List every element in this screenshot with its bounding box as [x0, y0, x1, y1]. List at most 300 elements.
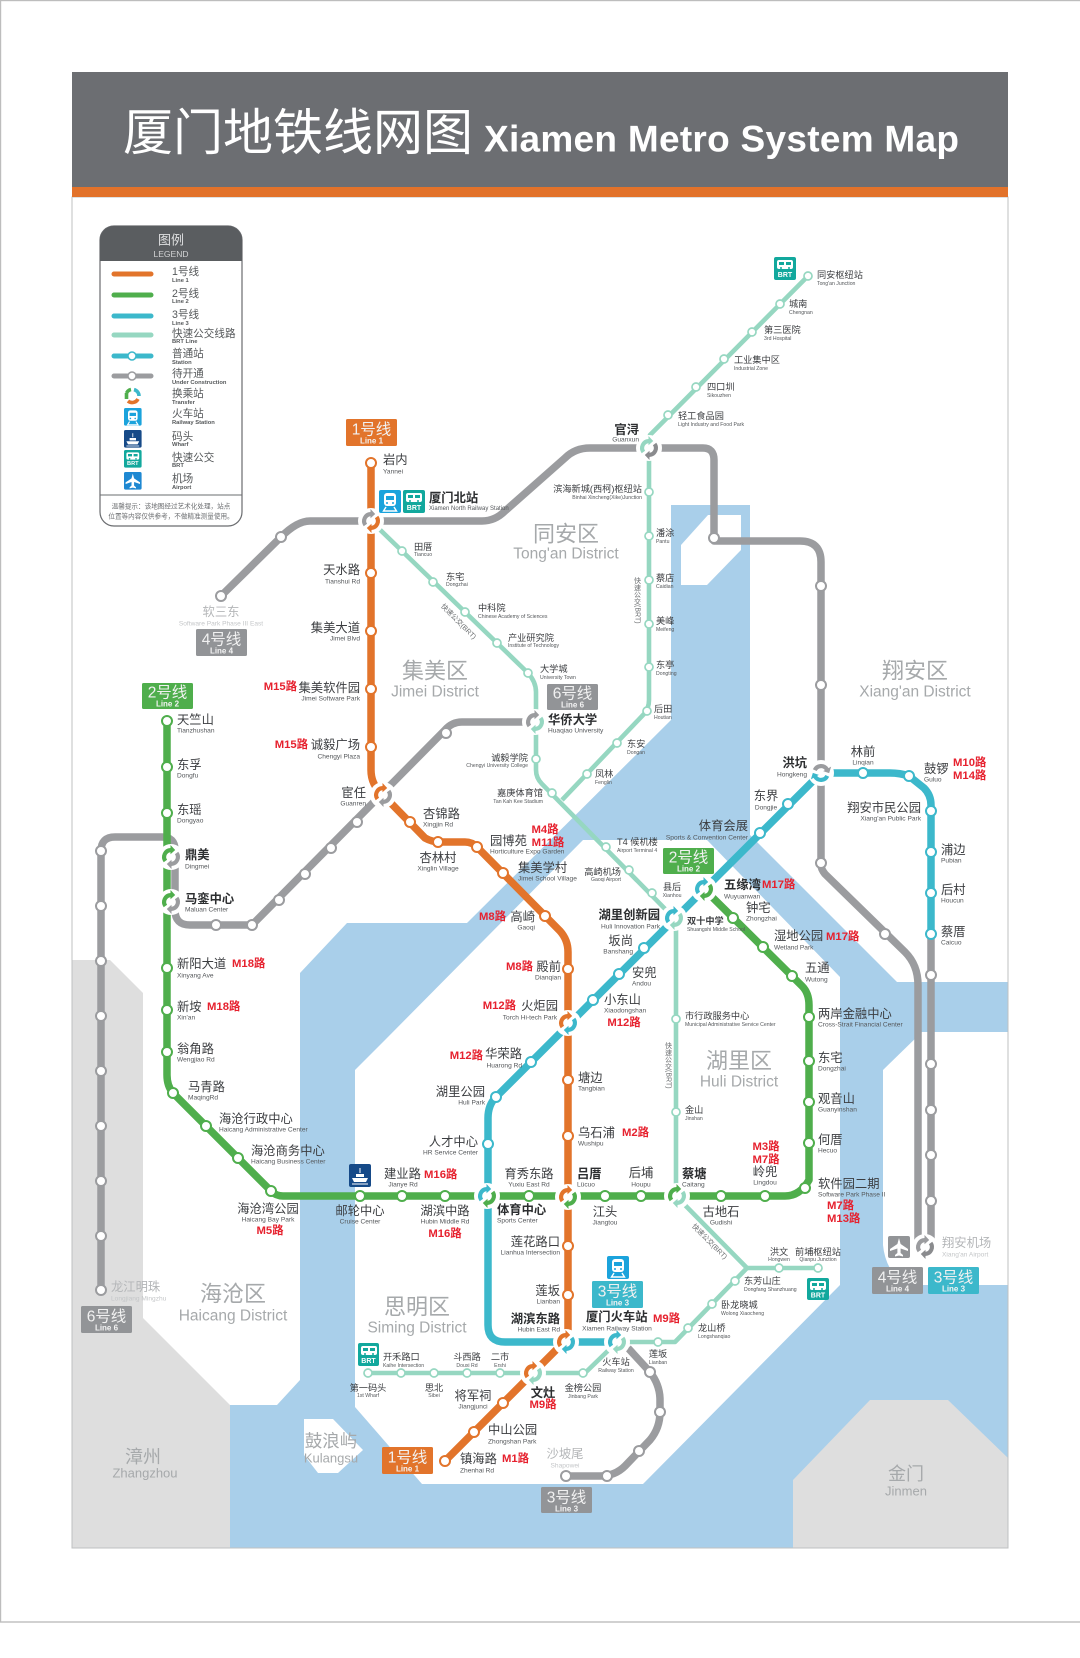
station: 华荣路: M12路	[450, 1048, 484, 1062]
station: 开禾路口	[383, 1351, 424, 1369]
panel: legend	[100, 226, 242, 526]
station: 后村: Houcun	[941, 897, 964, 904]
route notes: BRT captions	[439, 576, 729, 1261]
station: 金山: 金山	[685, 1104, 703, 1115]
station: 新垵	[177, 999, 241, 1021]
station: 建业路: 建业路	[384, 1166, 421, 1181]
station: 洪坑: 洪坑	[782, 755, 807, 770]
district labels: 翔安区	[882, 658, 948, 683]
legend: station	[114, 347, 204, 366]
station: 湖里公园	[436, 1084, 486, 1106]
legend: Line 1	[114, 265, 199, 284]
station: 湖里公园: 湖里公园	[436, 1084, 485, 1099]
station: 天竺山: 天竺山	[177, 712, 214, 727]
station: 海沧商务中心: Haicang Business Center	[251, 1158, 326, 1165]
caption: BRT vertical Tong'an: 快速公交(BRT)	[634, 576, 641, 624]
transfer: 厦门火车站	[604, 1329, 630, 1355]
station: 林前	[851, 744, 875, 766]
station: 观音山	[818, 1091, 857, 1113]
station: 海沧商务中心	[251, 1143, 326, 1165]
station: 金山: Jinshan	[685, 1116, 703, 1122]
station: 沙坡尾: Shapowei	[551, 1462, 580, 1469]
station: 东亭: Dongting	[656, 671, 677, 677]
transfer: 吕厝	[555, 1184, 581, 1210]
station: 塘边: 塘边	[578, 1070, 603, 1085]
station: 大学城: University Town	[540, 675, 576, 681]
station: 蔡厝: Caicuo	[941, 939, 962, 946]
station: 殿前: 殿前	[536, 959, 561, 974]
station: 东亭	[656, 659, 677, 677]
station: 市行政服务中心	[685, 1010, 776, 1028]
transfer: 厦门北站	[358, 508, 384, 534]
station: 东安: Dongan	[627, 750, 645, 756]
station: 人才中心: HR Service Center	[423, 1149, 479, 1156]
legend: station: Station	[172, 360, 192, 366]
badge: Line 3 Shapowei: 3号线	[547, 1488, 586, 1506]
station: 蔡厝	[941, 925, 966, 946]
station: T4 候机楼: Airport Terminal 4	[617, 848, 657, 854]
badge: Line 2 east: Line 2	[677, 864, 701, 873]
station: 马青路: 马青路	[188, 1079, 225, 1094]
station: 官浔: Guanxun	[612, 436, 639, 443]
station: 体育中心: 体育中心	[497, 1202, 547, 1217]
station: 翔安机场: Xiang'an Airport	[942, 1251, 989, 1258]
station: 湖滨中路: 湖滨中路	[420, 1203, 470, 1218]
badge: Line 3 Shapowei: Line 3	[555, 1504, 579, 1513]
district labels: 海沧区	[200, 1281, 266, 1306]
station: 湖滨中路: M16路	[428, 1226, 462, 1240]
district labels: 湖里区	[706, 1048, 772, 1073]
district labels: Zhangzhou	[112, 1465, 178, 1480]
station: 岭兜: Lingdou	[753, 1179, 777, 1186]
station: 五缘湾: 五缘湾	[724, 877, 762, 892]
station: 新阳大道: Xinyang Ave	[177, 972, 214, 979]
station: 新垵: Xin'an	[177, 1014, 195, 1021]
station: 东芳山庄: 东芳山庄	[744, 1275, 781, 1286]
station: 人才中心	[423, 1134, 479, 1156]
icon: BRT at Tong'an: BRT	[778, 272, 793, 279]
station: 城南: Chengnan	[789, 310, 813, 316]
legend divider and note	[100, 495, 242, 520]
station: 莲坂: 莲坂	[535, 1284, 560, 1298]
badge: Line 2 west: Line 2	[156, 699, 180, 708]
station: 马銮中心: 马銮中心	[185, 891, 235, 906]
station: 软三东: 软三东	[203, 605, 239, 619]
station: 厦门北站	[429, 490, 509, 512]
station labels: Line 1	[264, 452, 650, 1474]
badge: Line 1 top: 1号线	[352, 420, 391, 438]
station: 思北: Sibei	[428, 1393, 440, 1399]
station: 建业路: M16路	[424, 1167, 458, 1181]
station: 坂尚: 坂尚	[608, 934, 633, 948]
stations: Line 1	[366, 458, 573, 1466]
station: 华侨大学: Huaqiao University	[548, 727, 604, 734]
station: 凤林: Fenglin	[595, 780, 612, 786]
badge: Line 6 bottom: 6号线	[87, 1307, 126, 1325]
station: 嘉庚体育馆: Tan Kah Kee Stadium	[493, 799, 543, 805]
station: 邮轮中心: 邮轮中心	[335, 1203, 385, 1218]
station: 前埔枢纽站: 前埔枢纽站	[795, 1246, 841, 1257]
station: 小东山: M12路	[607, 1015, 641, 1029]
station: 浦边: 浦边	[941, 843, 966, 857]
badge: Line 2 west: 2号线	[148, 683, 187, 701]
station: 湖里创新园: Huli Innovation Park	[601, 923, 661, 930]
legend: Line 1: Line 1	[172, 278, 190, 284]
station: 湖滨东路	[511, 1311, 561, 1333]
station: 后田: 后田	[654, 704, 672, 714]
station: 二市	[491, 1351, 509, 1369]
legend header: 图例	[158, 232, 184, 247]
legend: wharf	[124, 430, 194, 448]
station labels: BRT	[350, 269, 863, 1400]
station: 县后: 县后	[663, 882, 681, 892]
station: 凤林: 凤林	[595, 768, 613, 779]
caption: BRT diagonal Jimei: 快速公交(BRT)	[439, 602, 478, 641]
station: 高崎机场: Gaoqi Airport	[591, 877, 622, 883]
station: 华荣路: 华荣路	[485, 1046, 522, 1061]
station: 集美软件园: M15路	[264, 679, 298, 693]
station: 建业路	[384, 1166, 458, 1188]
station: 工业集中区: 工业集中区	[734, 354, 780, 365]
legend: wharf: Wharf	[172, 442, 188, 448]
badge: Line 6 top: Line 6	[561, 700, 585, 709]
station: 双十中学: 双十中学	[687, 915, 724, 926]
station: 东界	[754, 789, 778, 811]
station: 市行政服务中心: 市行政服务中心	[685, 1010, 749, 1021]
station: 古地石: 古地石	[703, 1204, 739, 1219]
station: 东亭: 东亭	[656, 659, 674, 670]
legend: airport	[124, 472, 193, 491]
station: 第三医院: 第三医院	[764, 324, 801, 335]
station: 厦门火车站	[582, 1309, 681, 1332]
station: 坂尚	[603, 934, 633, 955]
station: 育秀东路	[504, 1166, 554, 1188]
station: 林前: 林前	[851, 744, 875, 759]
station: 金山	[685, 1104, 703, 1122]
station: 宦任: Guanren	[340, 800, 366, 807]
BRT lines	[368, 276, 818, 1373]
station: 后田	[654, 704, 672, 721]
station: 滨海新城（西柯）枢纽站	[553, 483, 642, 501]
station: 华侨大学: 华侨大学	[548, 712, 597, 727]
legend: BRT	[124, 450, 215, 469]
station: 海沧湾公园: 海沧湾公园	[237, 1201, 299, 1216]
caption: BRT vertical Huli: 快速公交(BRT)	[664, 1041, 672, 1089]
transfer: 洪坑	[808, 759, 834, 787]
station: 市行政服务中心: Municipal Administrative Service Center	[685, 1022, 776, 1028]
badge: Line 4 airport	[872, 1267, 923, 1294]
legend: BRT line: BRT Line	[172, 339, 198, 345]
transfer: 文灶	[520, 1360, 546, 1386]
station: 杏林村: 杏林村	[420, 851, 456, 865]
station: 后埔: Houpu	[631, 1181, 651, 1188]
station: 乌石浦: Wushipu	[578, 1140, 604, 1147]
station: 斗西路: Douxi Rd	[456, 1363, 478, 1369]
station: 潘涂: Pantu	[656, 539, 670, 545]
station: 江头: Jiangtou	[593, 1219, 618, 1226]
station: 马青路	[188, 1079, 225, 1101]
station: 何厝: Hecuo	[818, 1147, 837, 1154]
station: 工业集中区: Industrial Zone	[734, 366, 768, 372]
transfer: 宦任	[370, 782, 396, 808]
icon: wharf at Cruise Center	[349, 1164, 371, 1187]
station: 湖滨中路: Hubin Middle Rd	[421, 1218, 470, 1225]
station: 洪文	[768, 1246, 790, 1263]
station labels: Lines 4 and 6	[111, 422, 639, 1302]
station: 湖滨东路: 湖滨东路	[511, 1311, 561, 1326]
station: 东芳山庄	[744, 1275, 797, 1293]
station: 江头: 江头	[593, 1205, 617, 1219]
station: 翔安市民公园: Xiang'an Public Park	[860, 815, 922, 822]
badge: Line 1 top	[346, 419, 397, 446]
station: 小东山: 小东山	[604, 993, 641, 1007]
station: 产业研究院: 产业研究院	[508, 632, 554, 643]
legend: Line 3	[114, 308, 199, 327]
station: 天水路: Tianshui Rd	[325, 578, 360, 585]
station: 二市: 二市	[491, 1351, 509, 1362]
icon: BRT at Kaihe	[358, 1343, 379, 1366]
caption: BRT diagonal Huli: 快速公交(BRT)	[690, 1222, 729, 1261]
station: 轻工食品园: 轻工食品园	[678, 410, 724, 421]
icon: train at Xiamen Railway Station	[607, 1256, 629, 1279]
station: 钟宅	[746, 900, 777, 922]
station: 金榜公园: Jinbang Park	[568, 1394, 598, 1400]
station: 后田: Houtian	[654, 715, 672, 721]
station: 文灶: 文灶	[531, 1385, 555, 1400]
station: 观音山: Guanyinshan	[818, 1106, 857, 1113]
transfer stations	[158, 435, 938, 1386]
station: T4 候机楼	[617, 836, 658, 854]
station: 人才中心: 人才中心	[429, 1134, 478, 1149]
station: 安兜	[632, 965, 657, 987]
badge: Line 4 airport: 4号线	[878, 1268, 917, 1286]
station labels: Line 3	[423, 744, 991, 1469]
station: 湿地公园: M17路	[826, 929, 860, 943]
station: 滨海新城（西柯）枢纽站: 滨海新城(西柯)枢纽站	[553, 483, 642, 494]
station: 四口圳: 四口圳	[707, 382, 735, 392]
station: 体育中心	[497, 1202, 547, 1224]
station: 东界: Dongjie	[755, 804, 778, 811]
badge: Line 3 railway: Line 3	[606, 1298, 630, 1307]
district labels: Huli District	[700, 1073, 779, 1090]
station: 前埔枢纽站	[795, 1246, 841, 1263]
station: 鼓锣: M10路	[953, 755, 987, 769]
station: 美峰: 美峰	[656, 615, 674, 626]
station: 海沧行政中心: 海沧行政中心	[219, 1111, 293, 1126]
station: 集美大道: 集美大道	[311, 620, 360, 635]
station: 软件园二期	[818, 1177, 886, 1225]
title: English: Xiamen Metro System Map	[484, 118, 959, 159]
station: 大学城: 大学城	[540, 663, 568, 674]
station: 龙江明珠	[111, 1280, 167, 1302]
icon: BRT at Kaihe: BRT	[361, 1358, 376, 1365]
station: 中科院	[478, 602, 548, 620]
station: 吕厝: 吕厝	[577, 1167, 602, 1181]
legend: transfer: Transfer	[172, 400, 196, 406]
station: 龙江明珠: 龙江明珠	[111, 1280, 161, 1294]
legend header	[100, 226, 242, 261]
station: 第一码头	[350, 1382, 386, 1399]
station: 翁角路: Wengjiao Rd	[177, 1056, 215, 1063]
station: 五缘湾: M17路	[762, 877, 796, 891]
station: 杏林村	[417, 851, 459, 872]
legend: airport: 机场	[172, 472, 193, 485]
station: 后埔: 后埔	[629, 1166, 653, 1180]
station: 东宅	[818, 1050, 846, 1072]
station: 五通: 五通	[805, 961, 830, 975]
station: 殿前: Dianqian	[535, 974, 561, 981]
station: 前埔枢纽站: Qianpu Junction	[799, 1257, 837, 1263]
station: 思北	[425, 1383, 443, 1399]
station: 县后	[663, 882, 682, 899]
station: 马銮中心: Maluan Center	[185, 906, 229, 913]
station: 莲花路口: 莲花路口	[511, 1234, 560, 1249]
station: 嘉庚体育馆: 嘉庚体育馆	[497, 787, 543, 798]
station: 蔡塘: 蔡塘	[682, 1166, 707, 1181]
station: 美峰: Meifeng	[656, 627, 674, 633]
icon: BRT at Qianpu	[807, 1278, 829, 1300]
transfer: 官浔	[636, 435, 662, 461]
station: 华荣路: Huarong Rd	[486, 1062, 522, 1069]
station: 高崎: Gaoqi	[517, 924, 536, 931]
station: 中科院: 中科院	[478, 602, 506, 613]
station: 何厝: 何厝	[818, 1132, 843, 1147]
station: 双十中学	[687, 915, 745, 933]
station: 工业集中区	[734, 354, 780, 372]
station: 蔡店: Caidian	[656, 584, 674, 590]
station: 软件园二期: M7路	[827, 1198, 855, 1212]
station: 四口圳	[707, 382, 735, 399]
badge: Line 3 airport	[928, 1267, 979, 1294]
station: 五缘湾: Wuyuanwan	[724, 893, 760, 900]
station: 开禾路口: 开禾路口	[383, 1351, 420, 1362]
station: 洪坑	[777, 755, 807, 778]
station: 第三医院	[764, 324, 801, 342]
station: 思北: 思北	[425, 1383, 443, 1393]
station: 轻工食品园: Light Industry and Food Park	[678, 422, 744, 428]
transfer: 蔡塘	[664, 1183, 690, 1209]
station: 龙山桥	[698, 1322, 730, 1340]
station: 莲坂	[535, 1284, 560, 1305]
station: 建业路: Jianye Rd	[388, 1181, 418, 1188]
badge: Line 1 top: Line 1	[360, 436, 384, 445]
station: 高崎: M8路	[479, 909, 507, 923]
station: 集美学村	[518, 860, 577, 882]
station: 塘边	[578, 1070, 605, 1092]
station: 集美大道	[311, 620, 360, 642]
district labels: 同安区	[533, 521, 599, 546]
station: 东孚: Dongfu	[177, 772, 199, 779]
station: 轻工食品园	[678, 410, 744, 428]
icon: BRT at Xiamen North	[403, 490, 425, 513]
station: 软三东: Software Park Phase III East	[179, 620, 263, 627]
station: 乌石浦: 乌石浦	[578, 1125, 615, 1140]
station: 将军祠: Jiangjunci	[458, 1403, 488, 1410]
legend divider and note: 温馨提示：该地图经过艺术化处理，站点	[112, 501, 231, 510]
station: 县后: Xianhou	[663, 893, 682, 899]
station: 吕厝	[577, 1167, 602, 1188]
badge: Line 3 railway: 3号线	[598, 1282, 637, 1300]
station: 杏林村: Xinglin Village	[417, 865, 459, 872]
badge: Line 2 east	[663, 848, 714, 874]
water	[230, 505, 1008, 1548]
station: 高崎机场	[584, 866, 622, 883]
station: 乌石浦: M2路	[622, 1125, 650, 1139]
station: 集美软件园	[264, 679, 361, 702]
station: 钟宅: 钟宅	[746, 900, 771, 915]
transfer: 湖滨东路	[553, 1329, 579, 1355]
station: 软件园二期: 软件园二期	[818, 1177, 880, 1191]
district labels	[112, 521, 971, 1498]
district labels: Tong'an District	[513, 545, 619, 562]
badge: Line 6 top	[547, 684, 598, 710]
map icons	[349, 257, 910, 1366]
transfer: 体育中心	[474, 1183, 500, 1209]
station: 湿地公园	[774, 928, 860, 951]
station: 第三医院: 3rd Hospital	[764, 336, 791, 342]
station: 蔡店: 蔡店	[656, 572, 674, 583]
station: 城南: 城南	[789, 298, 807, 309]
station: 新阳大道	[177, 956, 266, 979]
station: 中山公园: 中山公园	[488, 1422, 537, 1437]
station: 鼎美: 鼎美	[185, 847, 210, 862]
station: 海沧湾公园: M5路	[256, 1223, 284, 1237]
station: 翔安机场: 翔安机场	[942, 1235, 991, 1250]
station: 官浔	[612, 422, 639, 443]
station: 镇海路: 镇海路	[460, 1451, 497, 1466]
station: 岭兜	[752, 1139, 780, 1186]
station: 殿前	[506, 959, 561, 981]
station: 东宅: 东宅	[818, 1050, 843, 1065]
station: 后村: 后村	[941, 883, 966, 897]
station: 诚毅广场	[275, 737, 360, 760]
station: 浦边: Pubian	[941, 857, 962, 864]
station: 火炬园: M12路	[483, 998, 517, 1012]
station: 安兜: 安兜	[632, 965, 657, 980]
station: 中科院: Chinese Academy of Sciences	[478, 614, 548, 620]
station: 第一码头: 第一码头	[350, 1382, 386, 1393]
badge: Line 6 bottom: Line 6	[95, 1323, 119, 1332]
station: 东瑶	[177, 803, 204, 824]
station: 田厝: Tiancuo	[414, 552, 432, 558]
district labels: Jimei District	[391, 683, 480, 700]
station: 将军祠	[455, 1389, 491, 1410]
station: 东宅 BRT: 东宅	[446, 571, 464, 582]
station: 斗西路	[453, 1351, 481, 1369]
station: 马青路: MaqingRd	[188, 1094, 218, 1101]
station: 龙山桥: Longshanqiao	[698, 1334, 730, 1340]
station: 小东山	[604, 993, 646, 1029]
station: 卧龙晓城	[721, 1299, 764, 1317]
legend: Line 2	[114, 287, 199, 305]
station: 翔安市民公园	[847, 800, 922, 822]
station: 第一码头: 1st Wharf	[357, 1393, 380, 1399]
station: 鼓锣: M14路	[953, 768, 987, 782]
map panel	[72, 197, 1008, 1548]
station: 鼎美: Dingmei	[185, 863, 210, 870]
badge: Line 4 west: Line 4	[210, 646, 234, 655]
station: 金榜公园	[565, 1382, 601, 1400]
legend: railway station: Railway Station	[172, 420, 215, 426]
station: 五通	[805, 961, 830, 983]
station: 海沧行政中心: Haicang Administrative Center	[219, 1126, 308, 1133]
station: 洪坑: Hongkeng	[777, 771, 807, 778]
legend: BRT: 快速公交	[172, 451, 215, 464]
station: 园博苑	[490, 822, 565, 855]
station: 二市: Ershi	[494, 1363, 506, 1369]
legend: Line 3: Line 3	[172, 321, 190, 327]
station: 蔡塘: Caitang	[682, 1181, 705, 1188]
